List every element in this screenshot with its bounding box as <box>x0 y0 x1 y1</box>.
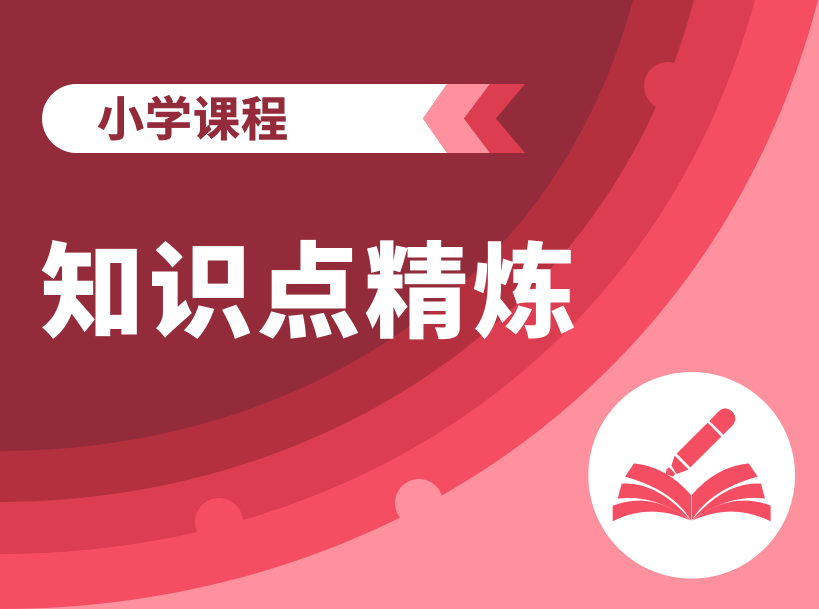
curved band: deep red <box>0 0 694 502</box>
icon circle <box>588 372 795 579</box>
icon: open book and pen <box>588 372 795 579</box>
subtitle text: 小学课程 <box>97 93 289 146</box>
title: 知识点精炼 <box>40 236 581 352</box>
curved band: darkest panel <box>0 0 633 451</box>
icon: book <box>613 463 771 521</box>
notch: bump upper right <box>644 62 692 110</box>
notch: bump lower left <box>195 498 243 546</box>
chevron: pink <box>423 84 490 153</box>
chevron: red <box>464 84 525 153</box>
subtitle pill <box>42 84 525 153</box>
notch: bump lower right <box>395 479 443 527</box>
icon: pen <box>666 408 735 477</box>
